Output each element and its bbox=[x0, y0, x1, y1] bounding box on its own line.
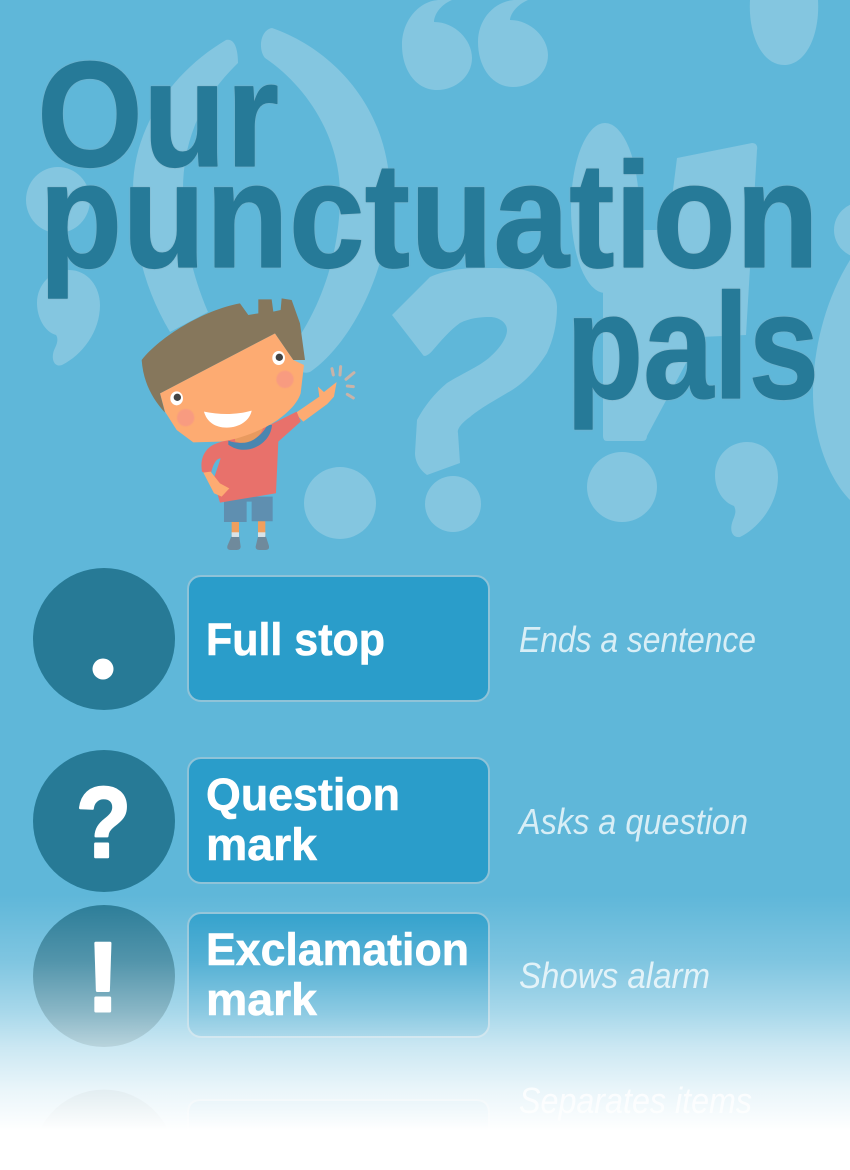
icon: exclamation mark bbox=[33, 905, 175, 1047]
face bbox=[160, 333, 304, 442]
label: full stop bbox=[188, 576, 489, 701]
t-shirt bbox=[201, 412, 301, 503]
description: comma: Separates items bbox=[519, 1080, 752, 1121]
icon: question mark: ? bbox=[76, 767, 131, 879]
row: faded comma icon and box bbox=[33, 1090, 489, 1169]
collar bbox=[228, 425, 272, 450]
label: question mark: Question bbox=[206, 769, 400, 820]
white fade overlay bbox=[0, 895, 850, 1170]
smile bbox=[204, 411, 252, 428]
character: pointing boy bbox=[142, 298, 354, 550]
label box: comma bbox=[188, 1100, 489, 1168]
row: exclamation mark bbox=[33, 905, 710, 1047]
sparkle bbox=[332, 367, 354, 398]
description: question mark: Asks a question bbox=[517, 801, 748, 842]
description: full stop: Ends a sentence bbox=[519, 619, 756, 660]
legs bbox=[224, 497, 273, 550]
icon: comma circle bbox=[33, 1090, 175, 1169]
icon: full stop bbox=[33, 568, 175, 710]
background punctuation shapes bbox=[26, 0, 850, 539]
other hand bbox=[203, 472, 229, 497]
row: question mark bbox=[33, 750, 748, 892]
label: exclamation mark: Exclamation bbox=[206, 924, 469, 975]
row: full stop bbox=[33, 568, 756, 710]
label: exclamation mark: mark bbox=[206, 974, 318, 1025]
description: exclamation mark: Shows alarm bbox=[519, 955, 710, 996]
label: question mark bbox=[188, 758, 489, 883]
hair bbox=[142, 298, 305, 413]
title bbox=[37, 30, 819, 430]
label: full stop: Full stop bbox=[206, 614, 385, 665]
title: Our bbox=[37, 30, 279, 198]
cheeks bbox=[177, 409, 194, 426]
label: question mark: mark bbox=[206, 819, 318, 870]
icon: exclamation mark: ! bbox=[87, 922, 119, 1032]
arm pointing bbox=[295, 382, 337, 422]
icon: question mark bbox=[33, 750, 175, 892]
eyes bbox=[170, 351, 285, 405]
label: exclamation mark bbox=[188, 913, 489, 1037]
